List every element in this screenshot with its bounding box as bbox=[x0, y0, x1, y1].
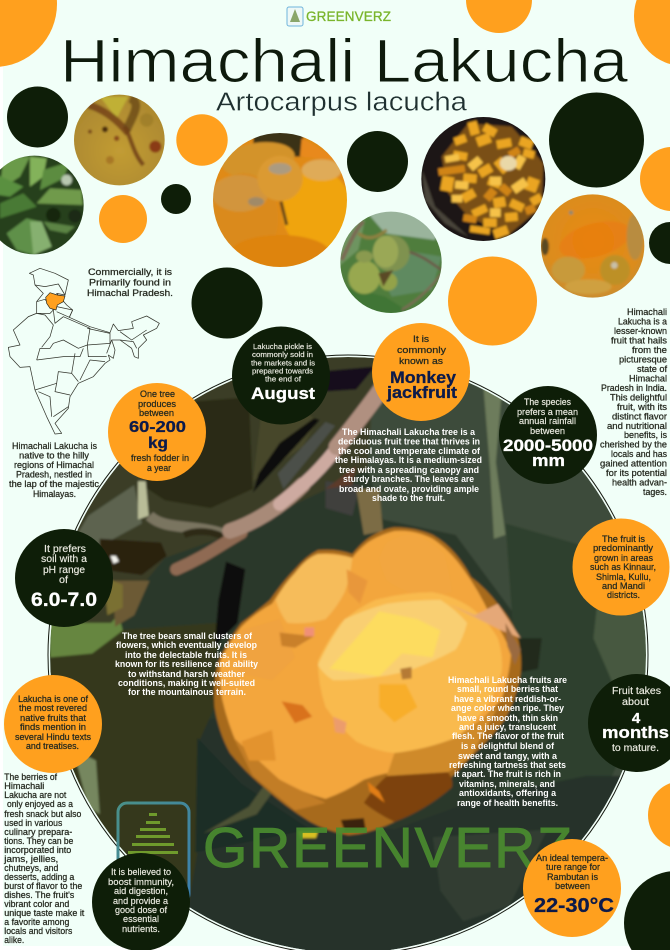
callout: Monkey jackfruit: jackfruit bbox=[386, 383, 457, 402]
text: native to Himachal: regions of Himachal bbox=[14, 460, 94, 470]
text: native to Himachal: Himalayas. bbox=[33, 489, 76, 499]
text: fruit description: have a smooth, thin skin bbox=[457, 713, 558, 723]
text: lesser-known fruit: picturesque bbox=[619, 354, 667, 364]
callout: yield per tree: kg bbox=[148, 435, 168, 452]
callout: temperature: Rambutan is bbox=[547, 872, 599, 882]
text: native to Himachal bbox=[9, 441, 100, 499]
callout: revered fruit bbox=[4, 675, 102, 773]
photo: fruit skin with rust marks bbox=[74, 94, 165, 186]
text: native to Himachal: native to the hilly bbox=[19, 450, 90, 460]
text: commercially found: Primarily found in bbox=[89, 278, 171, 288]
text: fruit description: and a juicy, translucent bbox=[459, 722, 556, 732]
callout: growing districts: Shimla, Kullu, bbox=[596, 572, 651, 582]
text: culinary uses: The berries of bbox=[4, 772, 58, 782]
callout: Monkey jackfruit: known as bbox=[399, 356, 444, 366]
callout: maturation time: Fruit takes bbox=[612, 686, 661, 697]
text: lesser-known fruit: distinct flavor bbox=[612, 412, 667, 422]
callout: revered fruit: finds mention in bbox=[20, 722, 86, 732]
callout: growing districts: and Mandi bbox=[602, 581, 645, 591]
text: lesser-known fruit: tages. bbox=[643, 487, 667, 497]
text: lesser-known fruit: from the bbox=[632, 345, 667, 355]
text: culinary uses: a favorite among bbox=[4, 917, 69, 927]
callout: August pickle: prepared towards bbox=[252, 366, 313, 375]
top brand logo bbox=[287, 7, 391, 26]
photo: green unripe fruit on branch bbox=[340, 212, 442, 313]
text: fruit description: flesh. The flavor of the fruit bbox=[452, 731, 564, 741]
text: fruit description: range of health benefits. bbox=[457, 798, 558, 808]
text: culinary uses: fresh snack but also bbox=[4, 809, 81, 819]
callout: revered fruit: native fruits that bbox=[20, 713, 87, 723]
callout: soil pH: of bbox=[59, 575, 68, 586]
text: tree description: tree with a spreading canopy and bbox=[339, 465, 479, 475]
callout: revered fruit: several Hindu texts bbox=[15, 732, 92, 742]
callout: health benefits bbox=[92, 853, 190, 950]
callout: August pickle bbox=[232, 326, 330, 424]
photo: lakucha pickle pieces bbox=[421, 117, 546, 241]
text: fruit description: refreshing tartness that sets bbox=[449, 760, 566, 770]
callout: August pickle: the end of bbox=[265, 374, 302, 383]
text: culinary uses: chutneys, and bbox=[4, 863, 58, 873]
callout: health benefits: aid digestion, bbox=[114, 886, 168, 896]
text: flowers and resilience: The tree bears small clusters of bbox=[122, 631, 252, 641]
callout: yield per tree: 60-200 bbox=[129, 419, 186, 436]
callout: rainfall: The species bbox=[524, 397, 572, 407]
text: culinary uses: culinary prepara- bbox=[4, 827, 72, 837]
top brand logo: GREENVERZ bbox=[306, 9, 391, 24]
callout: yield per tree: between bbox=[139, 408, 174, 418]
callout: health benefits: boost immunity, bbox=[108, 877, 174, 887]
text: tree description: sturdy branches. The leaves are bbox=[343, 474, 474, 484]
text: lesser-known fruit: health advan- bbox=[612, 478, 667, 488]
callout: maturation time: months bbox=[602, 723, 669, 742]
callout: revered fruit: and treatises. bbox=[26, 741, 79, 751]
callout: rainfall: prefers a mean bbox=[517, 407, 578, 417]
text: lesser-known fruit: cherished by the bbox=[600, 440, 667, 450]
text: lesser-known fruit: fruit, with its bbox=[617, 402, 668, 412]
circle rim bbox=[48, 355, 648, 950]
text: flowers and resilience bbox=[115, 631, 258, 697]
callout: August pickle: August bbox=[251, 384, 315, 403]
text: culinary uses: locals and visitors bbox=[4, 926, 73, 936]
callout: August pickle: commonly sold in bbox=[252, 350, 313, 359]
text: fruit description: vitamins, minerals, and bbox=[459, 779, 555, 789]
callout: maturation time: 4 bbox=[632, 710, 641, 727]
subtitle: Artocarpus lacucha bbox=[216, 88, 468, 116]
callout: health benefits: nutrients. bbox=[122, 924, 160, 934]
text: fruit description: it apart. The fruit is rich in bbox=[454, 769, 561, 779]
callout: temperature: between bbox=[555, 881, 590, 891]
text: native to Himachal: the lap of the majestic bbox=[9, 479, 100, 489]
callout: temperature: 22-30°C bbox=[534, 895, 614, 917]
big circular fruit illustration bbox=[50, 357, 646, 950]
text: culinary uses: unique taste make it bbox=[4, 908, 85, 918]
text: culinary uses: dishes. The fruit's bbox=[4, 890, 75, 900]
text: commercially found: Himachal Pradesh. bbox=[87, 288, 173, 298]
text: flowers and resilience: flowers, which eventually develop bbox=[116, 640, 258, 650]
photo: lakucha fruit close-up bbox=[213, 133, 347, 267]
callout: maturation time: about bbox=[622, 697, 649, 708]
text: culinary uses: Lakucha are not bbox=[4, 790, 67, 800]
text: tree description bbox=[335, 427, 482, 503]
callout: growing districts: The fruit is bbox=[602, 534, 646, 544]
callout: growing districts: grown in areas bbox=[594, 553, 654, 563]
callout: revered fruit: Lakucha is one of bbox=[18, 694, 89, 704]
callout: August pickle: Lakucha pickle is bbox=[253, 342, 312, 351]
text: culinary uses: jams, jellies, bbox=[3, 854, 58, 864]
photo: ripe orange fruit skin bbox=[541, 194, 644, 298]
text: commercially found bbox=[87, 267, 173, 298]
callout: soil pH: It prefers bbox=[44, 544, 86, 555]
text: lesser-known fruit: locals and has bbox=[611, 449, 668, 459]
callout: yield per tree: One tree bbox=[140, 389, 175, 399]
text: lesser-known fruit: fruit that hails bbox=[611, 336, 668, 346]
callout: temperature bbox=[523, 839, 621, 937]
callout: health benefits: It is believed to bbox=[111, 867, 171, 877]
callout: maturation time: to mature. bbox=[612, 743, 659, 754]
callout: temperature: An ideal tempera- bbox=[536, 853, 608, 863]
large brand logo: wordmark: GREENVERZ bbox=[203, 816, 572, 880]
Himachal Pradesh highlight bbox=[46, 293, 65, 310]
text: tree description: broad and ovate, providing ample bbox=[339, 484, 479, 494]
text: lesser-known fruit: Himachal bbox=[629, 374, 667, 384]
text: fruit description bbox=[448, 675, 567, 808]
text: native to Himachal: Himachali Lakucha is bbox=[12, 441, 98, 451]
text: flowers and resilience: for the mountainous terrain. bbox=[128, 687, 246, 697]
text: native to Himachal: Pradesh, nestled in bbox=[16, 470, 92, 480]
text: culinary uses: burst of flavor to the bbox=[4, 881, 82, 891]
text: lesser-known fruit: for its potential bbox=[606, 468, 667, 478]
callout: Monkey jackfruit: Monkey bbox=[390, 368, 457, 387]
callout: health benefits: essential bbox=[123, 914, 159, 924]
text: culinary uses: Himachali bbox=[4, 781, 44, 791]
callout: yield per tree: a year bbox=[147, 463, 171, 473]
callout: soil pH: soil with a bbox=[41, 554, 87, 565]
text: culinary uses: tions. They can be bbox=[4, 836, 73, 846]
callout: growing districts bbox=[572, 518, 670, 616]
title: Himachali Lakucha bbox=[60, 27, 628, 95]
callout: rainfall: between bbox=[530, 426, 565, 436]
callout: yield per tree: produces bbox=[138, 399, 177, 409]
text: culinary uses: used in various bbox=[4, 818, 63, 828]
callout: growing districts: such as Kinnaur, bbox=[590, 562, 656, 572]
text: flowers and resilience: to withstand harsh weather bbox=[128, 669, 246, 679]
callout: maturation time bbox=[588, 674, 670, 772]
text: lesser-known fruit bbox=[600, 307, 668, 497]
text: culinary uses: alike. bbox=[4, 935, 24, 945]
callout: yield per tree bbox=[108, 383, 206, 481]
callout: Monkey jackfruit: commonly bbox=[397, 345, 447, 355]
text: fruit description: ange color when ripe. They bbox=[451, 703, 564, 713]
text: fruit description: small, round berries that bbox=[457, 684, 558, 694]
text: lesser-known fruit: Pradesh in India. bbox=[601, 383, 667, 393]
callout: growing districts: districts. bbox=[607, 590, 640, 600]
text: lesser-known fruit: Himachali bbox=[627, 307, 667, 317]
text: tree description: The Himachali Lakucha tree is a bbox=[342, 427, 475, 437]
text: lesser-known fruit: and nutritional bbox=[607, 421, 667, 431]
text: tree description: shade to the fruit. bbox=[372, 493, 445, 503]
callout: yield per tree: fresh fodder in bbox=[131, 453, 189, 463]
text: tree description: the Himalayas. It is a medium-sized bbox=[335, 455, 482, 465]
text: lesser-known fruit: lesser-known bbox=[614, 326, 667, 336]
text: fruit description: antioxidants, offering a bbox=[459, 788, 556, 798]
callout: temperature: ture range for bbox=[546, 862, 600, 872]
text: fruit description: have a vibrant reddish-or- bbox=[454, 694, 561, 704]
text: lesser-known fruit: gained attention bbox=[600, 458, 667, 468]
callout: rainfall: 2000-5000 bbox=[503, 437, 593, 455]
text: tree description: deciduous fruit tree that thrives in bbox=[338, 436, 480, 446]
text: culinary uses: incorporated into bbox=[4, 845, 71, 855]
text: flowers and resilience: into the delectable fruits. It is bbox=[125, 650, 247, 660]
callout: August pickle: the markets and is bbox=[251, 358, 315, 367]
callout: Monkey jackfruit bbox=[372, 323, 470, 421]
text: fruit description: sweet and tangy, with a bbox=[458, 751, 557, 761]
text: culinary uses: desserts, adding a bbox=[4, 872, 74, 882]
callout: rainfall: mm bbox=[532, 452, 565, 470]
text: culinary uses: vibrant color and bbox=[4, 899, 69, 909]
text: lesser-known fruit: state of bbox=[637, 364, 668, 374]
callout: revered fruit: the most revered bbox=[19, 703, 87, 713]
text: commercially found: Commercially, it is bbox=[88, 267, 173, 277]
large brand logo: icon bbox=[118, 803, 189, 903]
callout: health benefits: good dose of bbox=[115, 905, 168, 915]
callout: rainfall bbox=[499, 386, 597, 484]
text: fruit description: is a delightful blend of bbox=[461, 741, 554, 751]
text: culinary uses: only enjoyed as a bbox=[7, 799, 73, 809]
text: lesser-known fruit: benefits, is bbox=[624, 430, 668, 440]
callout: soil pH: pH range bbox=[43, 565, 85, 576]
map of India with Himachal Pradesh highlighted bbox=[8, 268, 159, 434]
callout: growing districts: predominantly bbox=[593, 543, 654, 553]
text: flowers and resilience: conditions, making it well-suited bbox=[118, 678, 255, 688]
text: lesser-known fruit: Lakucha is a bbox=[618, 316, 667, 326]
text: tree description: the cool and temperate climate of bbox=[338, 446, 480, 456]
callout: Monkey jackfruit: It is bbox=[413, 334, 430, 344]
callout: rainfall: annual rainfall bbox=[519, 416, 576, 426]
text: lesser-known fruit: This delightful bbox=[610, 392, 667, 402]
callout: health benefits: and provide a bbox=[113, 896, 168, 906]
callout: soil pH bbox=[15, 529, 113, 627]
text: flowers and resilience: known for its resilience and ability bbox=[115, 659, 258, 669]
photo: leaves bbox=[0, 156, 84, 254]
text: culinary uses bbox=[3, 772, 85, 945]
callout: soil pH: 6.0-7.0 bbox=[31, 590, 97, 611]
text: fruit description: Himachali Lakucha fruits are bbox=[448, 675, 567, 685]
